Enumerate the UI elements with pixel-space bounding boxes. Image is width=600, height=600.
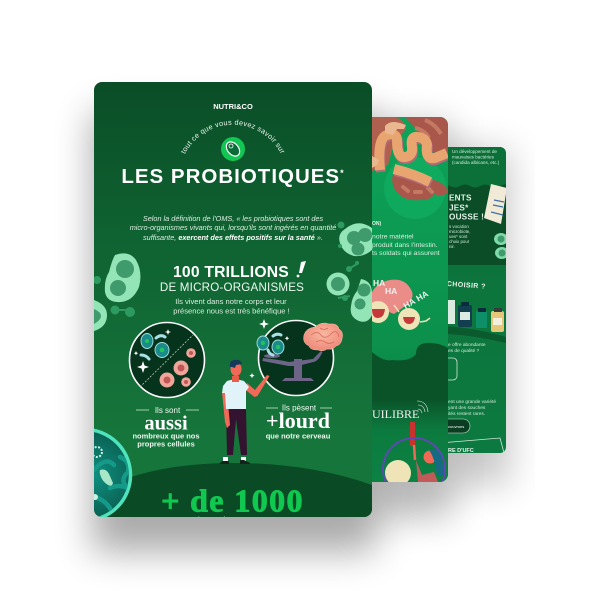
text: variety: ités restent rares. (448, 411, 485, 417)
intestine (379, 134, 447, 182)
panel: middle card (372, 117, 448, 482)
text block: heavier (266, 404, 332, 440)
sparkles (249, 319, 289, 378)
text: intro (173, 297, 290, 316)
text: abundance question: e offre abondante (448, 343, 486, 348)
text: HA HA: HA (401, 296, 417, 311)
text block: as many: propres cellules (137, 440, 195, 448)
glow circle (384, 157, 446, 219)
text: section label: ON) (372, 221, 382, 227)
button (448, 418, 470, 434)
text: variety: yant des souches (448, 405, 486, 411)
chart: bacteria vs cells circle (130, 322, 204, 398)
text: WHO definition: micro-organismes vivants qui, lorsqu'ils sont ingérés en quantité (130, 223, 336, 232)
heading: 100 trillions: 100 TRILLIONS (173, 264, 289, 281)
chart: scale and brain circle (249, 319, 343, 396)
heading: micro-organismes: DE MICRO-ORGANISMES (160, 281, 304, 294)
hand (385, 122, 406, 135)
text: vocation: choix pour (449, 239, 470, 244)
title: LES PROBIOTIQUES (121, 165, 340, 188)
dark band (448, 184, 506, 265)
illustration: laughing brain (367, 280, 430, 330)
text: variety: ent une grande variété (448, 400, 496, 405)
text: bad bacteria note: mauvaises bactéries (452, 154, 495, 160)
text: WHO definition (130, 214, 336, 242)
heading: equilibre: UILIBRE (372, 407, 419, 421)
brown upper right lobe (405, 117, 448, 155)
text: WHO definition: suffisante, exercent des effets positifs sur la santé ». (143, 233, 323, 242)
text: HA HA (374, 280, 429, 309)
text: HA HA: HA (373, 278, 385, 288)
text block: heavier: que notre cerveau (266, 432, 331, 440)
text: intestine paragraph: ts soldats qui assurent (372, 250, 440, 257)
title: * (340, 168, 345, 178)
text: vocation: microbiote, (449, 229, 470, 234)
text block: as many: nombreux que nos (132, 432, 200, 440)
text block: heavier: +lourd (266, 408, 330, 433)
text: bad bacteria note: Un développement de (452, 149, 497, 154)
illustration: green cells left (93, 253, 140, 331)
heading: how to choose: CHOISIR ? (447, 281, 486, 291)
hill (94, 463, 372, 517)
text: vocation: nir. (449, 244, 455, 249)
text block: as many (132, 406, 200, 448)
text: HA HA: HA (385, 286, 397, 296)
text: intro: Ils vivent dans notre corps et leur (175, 297, 287, 306)
text: curved subtitle: tout ce que vous devez savoir sur (181, 120, 284, 154)
scale (262, 346, 330, 381)
illustration: booklet (484, 184, 507, 224)
text: WHO definition: Selon la définition de l'OMS, « les probiotiques sont des (143, 214, 323, 223)
callout box (448, 358, 458, 380)
cut-off caption: de souches connues (195, 516, 269, 524)
illustration: aerial hoop (382, 422, 446, 482)
sparkles (134, 329, 171, 373)
drop shadows (92, 112, 510, 552)
icon: signal waves (417, 401, 428, 413)
illustration: green cells right (326, 222, 372, 322)
text block: as many: Ils sont (155, 406, 181, 415)
stat: + de 1000: + de 1000 (161, 482, 304, 518)
text: vocation: s vocation (449, 224, 469, 229)
brown lower lobe (392, 174, 448, 200)
left arm (222, 392, 230, 428)
text: abundance question: es de qualité ? (448, 348, 480, 354)
legs (226, 409, 247, 455)
illustration: brain and intestine (372, 117, 448, 200)
illustration: microscope lens circle (40, 430, 134, 520)
heading: back card: OUSSE ! (449, 212, 484, 222)
text block: as many: aussi (144, 412, 188, 434)
callout: CFU: RE D'UFC (448, 448, 474, 454)
heading: back card: JES* (449, 204, 469, 212)
intestine shadow (380, 136, 447, 184)
shirt (222, 380, 249, 409)
icon: brain (304, 323, 343, 351)
text: HA HA: HA (414, 289, 430, 303)
right arm (246, 375, 270, 397)
human cells (160, 348, 196, 388)
logo: NUTRI&CO: NUTRI&CO (213, 102, 253, 111)
dark wave (448, 326, 506, 343)
text: intestine paragraph: notre matériel (372, 234, 414, 240)
bacteria on scale (257, 334, 284, 355)
text: intestine paragraph: produit dans l'intestin. (372, 242, 438, 249)
heading: back card: ENTS (449, 194, 472, 202)
text: bad bacteria note: (candida albicans, etc.) (452, 160, 500, 165)
button: couvrons (448, 424, 464, 429)
panel: back card (448, 147, 506, 453)
text block: heavier: Ils pèsent (282, 404, 317, 412)
panel: front card (94, 82, 372, 517)
dark cloud section (372, 343, 448, 483)
illustration: person (219, 360, 270, 464)
socks (223, 457, 246, 461)
icon: probiotic badge (221, 137, 245, 161)
illustration: product bottles (448, 300, 504, 332)
text: intro: présence nous est très bénéfique ! (173, 306, 290, 316)
callout: CFU (448, 438, 504, 452)
bacteria (141, 334, 169, 359)
icon: exclamation mark (297, 261, 306, 277)
text: vocation: ues* sont (449, 234, 468, 239)
illustration: cell (494, 233, 506, 259)
brown upper left lobe (372, 117, 406, 171)
neck and head (232, 376, 239, 382)
shoes (219, 460, 250, 464)
